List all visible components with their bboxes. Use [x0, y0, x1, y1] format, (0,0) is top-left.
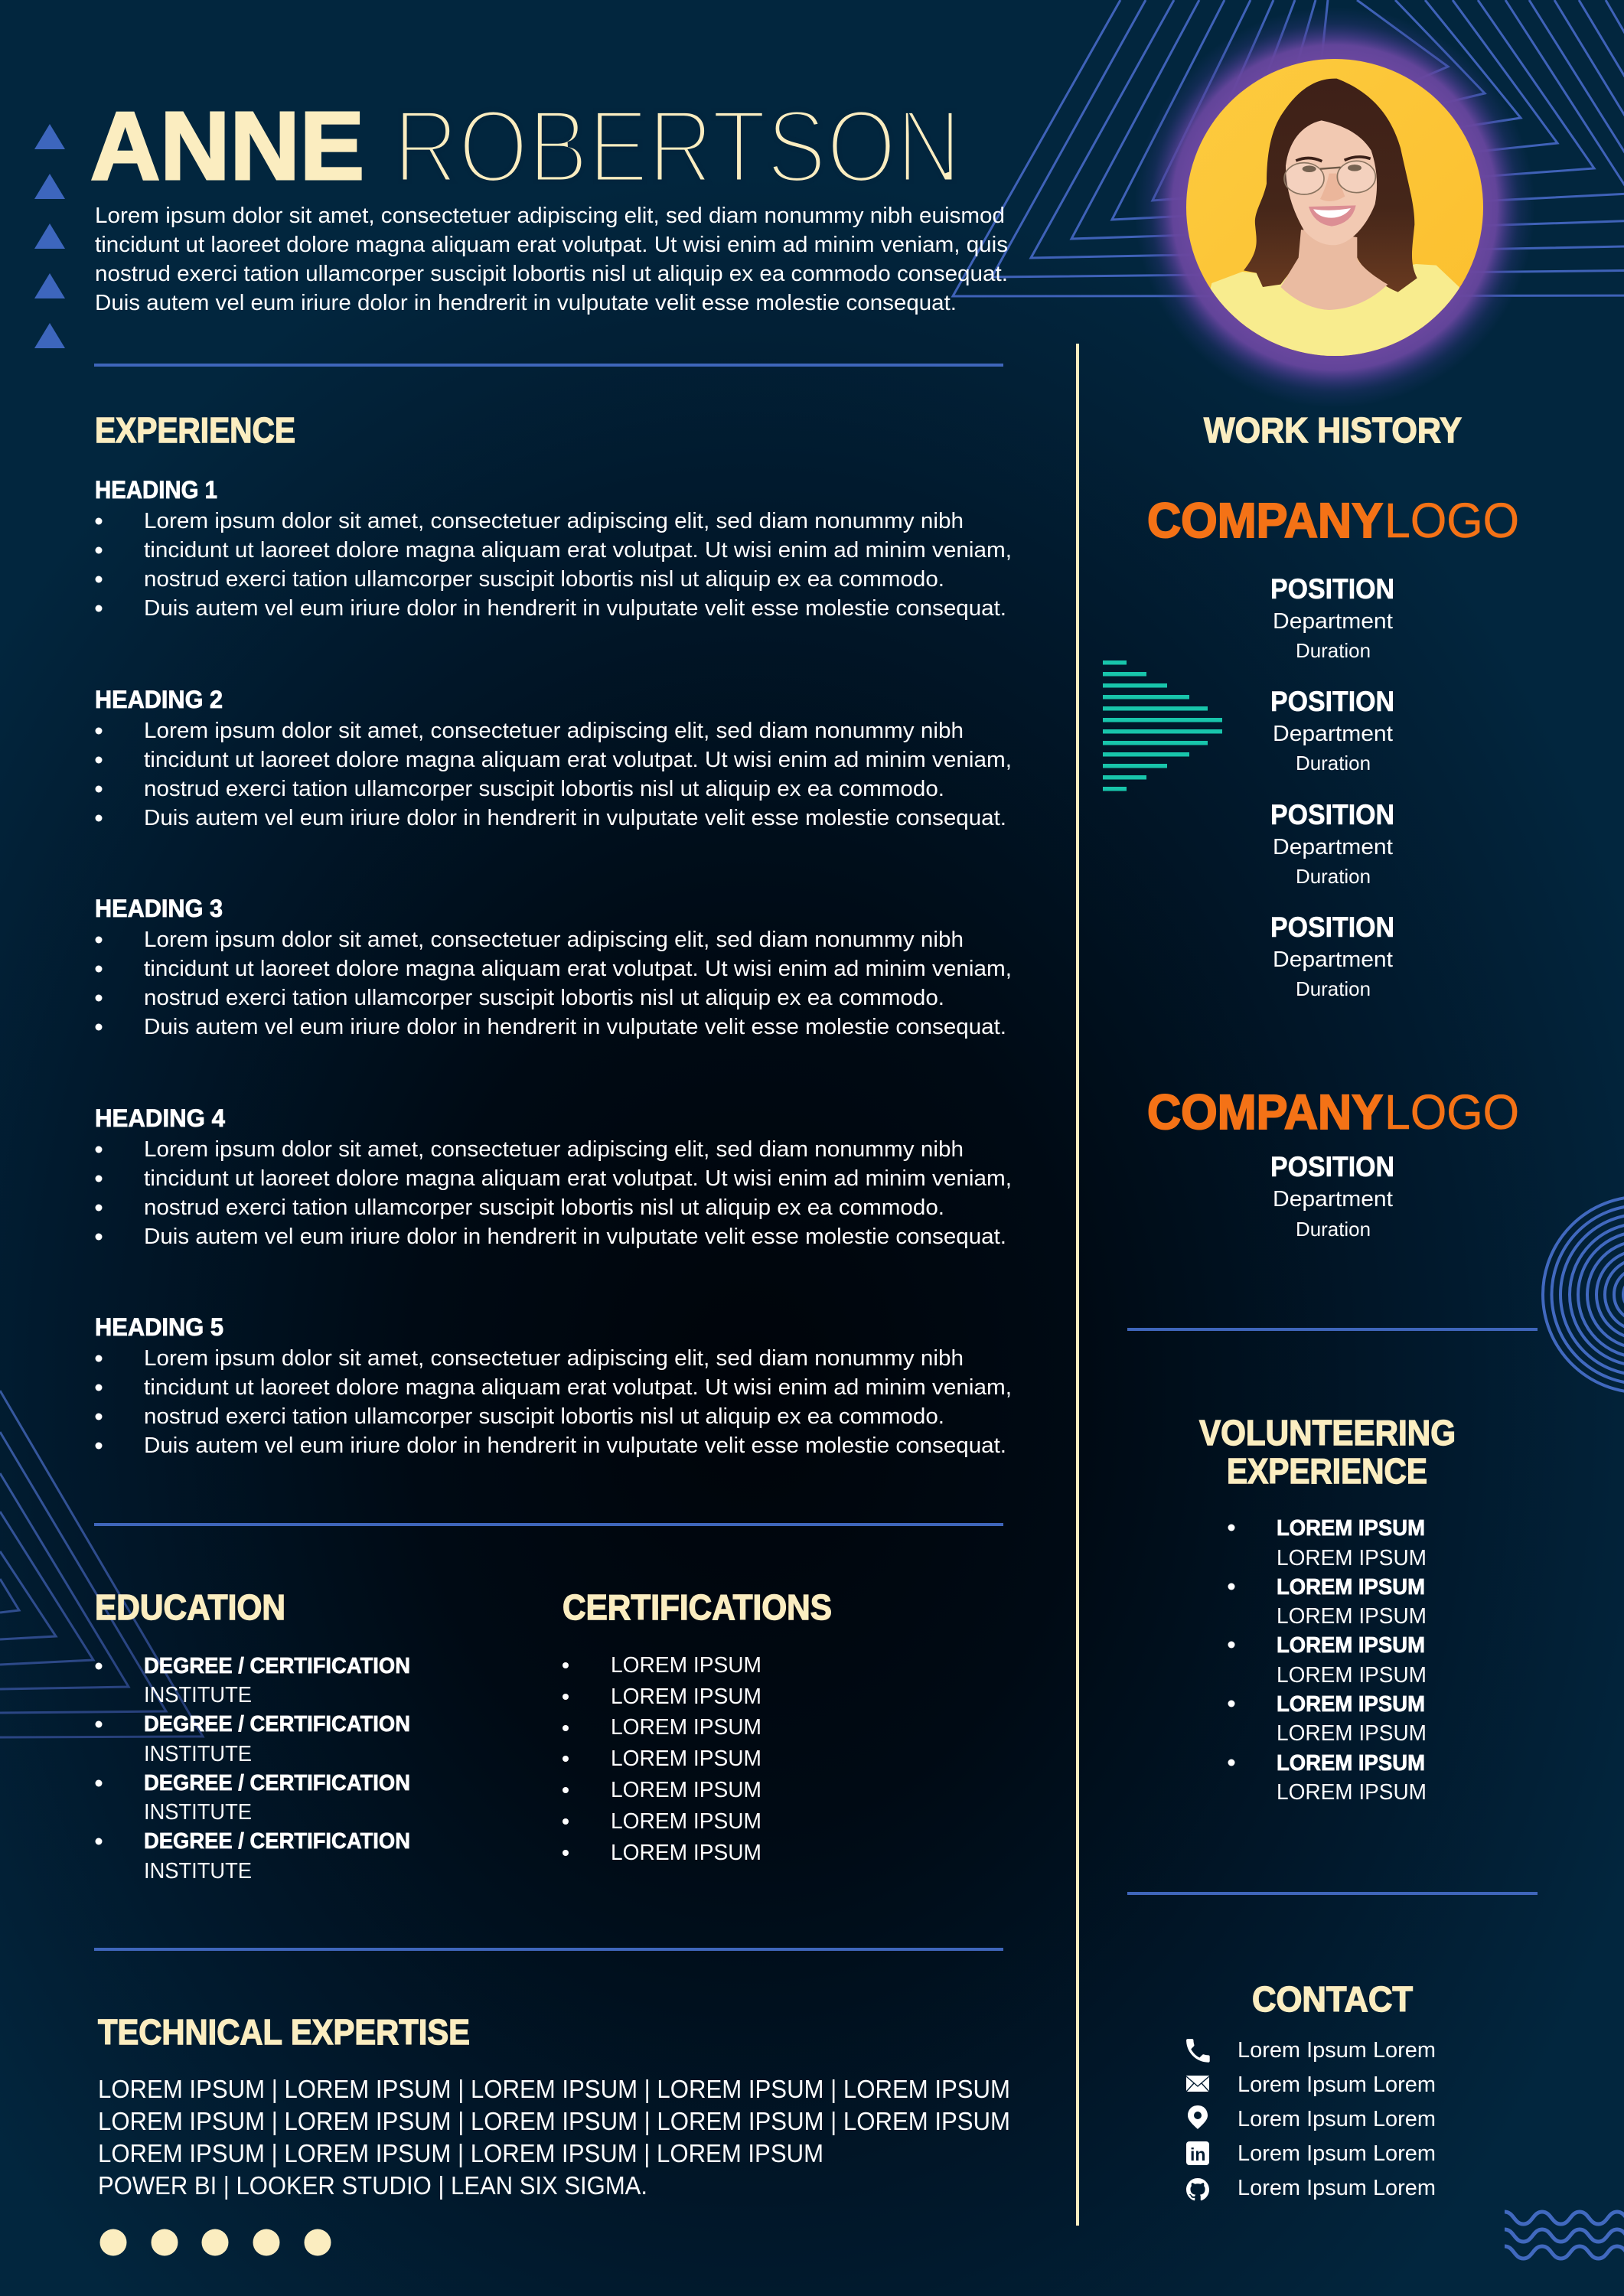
education list	[95, 1654, 410, 1883]
position 3	[1270, 799, 1394, 888]
name title	[90, 88, 961, 204]
experience block 4: tincidunt ut laoreet dolore magna aliquam erat volutpat. Ut wisi enim ad minim veniam,	[144, 1166, 1012, 1191]
experience block 5: Duis autem vel eum iriure dolor in hendrerit in vulputate velit esse molestie consequat.	[144, 1433, 1006, 1458]
experience block 5: nostrud exerci tation ullamcorper suscipit lobortis nisl ut aliquip ex ea commodo.	[144, 1404, 944, 1429]
experience block 1: Lorem ipsum dolor sit amet, consectetuer adipiscing elit, sed diam nonummy nibh	[144, 509, 964, 533]
experience block 1: HEADING 1	[95, 476, 217, 504]
volunteering list: LOREM IPSUM	[1277, 1575, 1425, 1600]
decorative concentric circles	[1543, 1197, 1624, 1393]
position 3: Department	[1273, 835, 1393, 859]
name title: ROBERTSON	[393, 88, 961, 204]
experience block 3: nostrud exerci tation ullamcorper suscipit lobortis nisl ut aliquip ex ea commodo.	[144, 986, 944, 1010]
experience block 3: HEADING 3	[95, 895, 223, 922]
education list: INSTITUTE	[144, 1683, 252, 1707]
experience block 4: nostrud exerci tation ullamcorper suscipit lobortis nisl ut aliquip ex ea commodo.	[144, 1195, 944, 1220]
position 5: Duration	[1296, 1218, 1371, 1241]
experience block 1	[95, 476, 1012, 621]
certifications list: LOREM IPSUM	[611, 1809, 761, 1834]
experience block 2: Lorem ipsum dolor sit amet, consectetuer adipiscing elit, sed diam nonummy nibh	[144, 719, 964, 743]
position 2: Department	[1273, 722, 1393, 746]
position 1: POSITION	[1270, 573, 1394, 605]
education list: DEGREE / CERTIFICATION	[144, 1829, 410, 1854]
experience block 2: HEADING 2	[95, 686, 223, 713]
experience block 5: tincidunt ut laoreet dolore magna aliquam erat volutpat. Ut wisi enim ad minim veniam,	[144, 1375, 1012, 1400]
panel: education	[95, 1587, 410, 1883]
experience block 2: tincidunt ut laoreet dolore magna aliquam erat volutpat. Ut wisi enim ad minim veniam,	[144, 748, 1012, 772]
education list: INSTITUTE	[144, 1742, 252, 1766]
education list: DEGREE / CERTIFICATION	[144, 1654, 410, 1678]
volunteering list: LOREM IPSUM	[1277, 1633, 1425, 1658]
company logo 2	[1147, 1084, 1519, 1140]
volunteering list: LOREM IPSUM	[1277, 1546, 1427, 1570]
company logo 1: COMPANY	[1147, 493, 1383, 548]
position 3: Duration	[1296, 865, 1371, 888]
panel: technical expertise	[98, 2012, 1010, 2256]
volunteering list: LOREM IPSUM	[1277, 1663, 1427, 1688]
intro paragraph	[95, 204, 1008, 315]
experience block 3: tincidunt ut laoreet dolore magna aliquam erat volutpat. Ut wisi enim ad minim veniam,	[144, 957, 1012, 981]
experience block 4: Lorem ipsum dolor sit amet, consectetuer adipiscing elit, sed diam nonummy nibh	[144, 1137, 964, 1162]
position 3: POSITION	[1270, 799, 1394, 830]
decorative waves	[1505, 2212, 1624, 2258]
position 5	[1270, 1151, 1394, 1241]
position 5: POSITION	[1270, 1151, 1394, 1182]
intro paragraph: Duis autem vel eum iriure dolor in hendrerit in vulputate velit esse molestie consequat.	[95, 291, 957, 315]
contact row: github: Lorem Ipsum Lorem	[1238, 2176, 1436, 2200]
heading: experience: EXPERIENCE	[95, 410, 295, 450]
panel: work history	[1147, 410, 1519, 1241]
contact row: location: Lorem Ipsum Lorem	[1238, 2107, 1436, 2131]
experience block 1: tincidunt ut laoreet dolore magna aliquam erat volutpat. Ut wisi enim ad minim veniam,	[144, 538, 1012, 563]
company logo 1: LOGO	[1384, 493, 1519, 548]
decorative concentric triangles top right	[953, 0, 1624, 296]
volunteering list: LOREM IPSUM	[1277, 1721, 1427, 1746]
position 2: POSITION	[1270, 686, 1394, 717]
position 4: Duration	[1296, 977, 1371, 1000]
education list: INSTITUTE	[144, 1800, 252, 1825]
decorative teal bars	[1103, 660, 1222, 791]
volunteering list: LOREM IPSUM	[1277, 1751, 1425, 1776]
expertise text: LOREM IPSUM | LOREM IPSUM | LOREM IPSUM | LOREM IPSUM	[98, 2139, 823, 2167]
experience block 1: Duis autem vel eum iriure dolor in hendrerit in vulputate velit esse molestie consequat.	[144, 596, 1006, 621]
experience block 5: Lorem ipsum dolor sit amet, consectetuer adipiscing elit, sed diam nonummy nibh	[144, 1346, 964, 1371]
volunteering list: LOREM IPSUM	[1277, 1604, 1427, 1629]
panel: experience	[95, 410, 1012, 1458]
position 5: Department	[1273, 1187, 1393, 1212]
experience block 2	[95, 686, 1012, 830]
panel: certifications	[563, 1587, 832, 1865]
expertise text: LOREM IPSUM | LOREM IPSUM | LOREM IPSUM | LOREM IPSUM | LOREM IPSUM	[98, 2107, 1010, 2135]
position 4	[1270, 912, 1394, 1000]
certifications list	[563, 1653, 761, 1865]
contact row: linkedin: in	[1190, 2144, 1205, 2164]
panel: contact	[1186, 1979, 1436, 2200]
volunteering list	[1228, 1516, 1427, 1805]
certifications list: LOREM IPSUM	[611, 1684, 761, 1709]
volunteering list: LOREM IPSUM	[1277, 1516, 1425, 1541]
heading: volunteering experience: EXPERIENCE	[1227, 1451, 1427, 1491]
expertise text: LOREM IPSUM | LOREM IPSUM | LOREM IPSUM | LOREM IPSUM | LOREM IPSUM	[98, 2075, 1010, 2103]
volunteering list: LOREM IPSUM	[1277, 1692, 1425, 1717]
certifications list: LOREM IPSUM	[611, 1841, 761, 1865]
certifications list: LOREM IPSUM	[611, 1778, 761, 1802]
experience block 5	[95, 1313, 1012, 1458]
column divider	[1076, 344, 1079, 2226]
position 4: Department	[1273, 947, 1393, 972]
experience block 3: Lorem ipsum dolor sit amet, consectetuer adipiscing elit, sed diam nonummy nibh	[144, 928, 964, 952]
expertise text: POWER BI | LOOKER STUDIO | LEAN SIX SIGMA.	[98, 2171, 647, 2200]
position 4: POSITION	[1270, 912, 1394, 943]
experience block 3: Duis autem vel eum iriure dolor in hendrerit in vulputate velit esse molestie consequat.	[144, 1015, 1006, 1039]
education list: INSTITUTE	[144, 1859, 252, 1883]
experience block 2: nostrud exerci tation ullamcorper suscipit lobortis nisl ut aliquip ex ea commodo.	[144, 777, 944, 801]
intro paragraph: nostrud exerci tation ullamcorper suscipit lobortis nisl ut aliquip ex ea commodo consequat.	[95, 262, 1008, 286]
contact row: phone: Lorem Ipsum Lorem	[1238, 2038, 1436, 2063]
expertise text	[98, 2075, 1010, 2200]
heading: contact: CONTACT	[1252, 1979, 1413, 2019]
intro paragraph: Lorem ipsum dolor sit amet, consectetuer adipiscing elit, sed diam nonummy nibh euismod	[95, 204, 1005, 228]
rating dots	[99, 2229, 331, 2256]
heading: technical expertise: TECHNICAL EXPERTISE	[98, 2012, 470, 2052]
experience block 2: Duis autem vel eum iriure dolor in hendrerit in vulputate velit esse molestie consequat.	[144, 806, 1006, 830]
portrait photo with purple glow	[1134, 7, 1535, 408]
heading: volunteering experience	[1199, 1413, 1456, 1491]
contact row: linkedin: Lorem Ipsum Lorem	[1238, 2141, 1436, 2166]
experience block 4: HEADING 4	[95, 1104, 225, 1132]
experience block 4: Duis autem vel eum iriure dolor in hendrerit in vulputate velit esse molestie consequat.	[144, 1225, 1006, 1249]
position 1	[1270, 573, 1394, 662]
heading: work history: WORK HISTORY	[1204, 410, 1462, 450]
experience block 1: nostrud exerci tation ullamcorper suscipit lobortis nisl ut aliquip ex ea commodo.	[144, 567, 944, 592]
company logo 2: COMPANY	[1147, 1084, 1383, 1140]
panel: volunteering experience	[1199, 1413, 1456, 1805]
heading: certifications: CERTIFICATIONS	[563, 1587, 832, 1627]
heading: volunteering experience: VOLUNTEERING	[1199, 1413, 1456, 1453]
position 2: Duration	[1296, 752, 1371, 775]
company logo 2: LOGO	[1384, 1084, 1519, 1140]
contact row: email: Lorem Ipsum Lorem	[1238, 2073, 1436, 2097]
volunteering list: LOREM IPSUM	[1277, 1780, 1427, 1805]
triangle column icons	[34, 124, 65, 348]
certifications list: LOREM IPSUM	[611, 1653, 761, 1678]
intro paragraph: tincidunt ut laoreet dolore magna aliquam erat volutpat. Ut wisi enim ad minim veniam, quis	[95, 233, 1008, 257]
education list: DEGREE / CERTIFICATION	[144, 1771, 410, 1795]
position 1: Duration	[1296, 639, 1371, 662]
name title: ANNE	[90, 92, 364, 200]
heading: education: EDUCATION	[95, 1587, 285, 1627]
experience block 3	[95, 895, 1012, 1039]
certifications list: LOREM IPSUM	[611, 1715, 761, 1740]
position 1: Department	[1273, 609, 1393, 634]
company logo 1	[1147, 493, 1519, 548]
education list: DEGREE / CERTIFICATION	[144, 1712, 410, 1737]
experience block 4	[95, 1104, 1012, 1249]
decorative concentric triangles left	[0, 1391, 203, 1737]
certifications list: LOREM IPSUM	[611, 1746, 761, 1771]
experience block 5: HEADING 5	[95, 1313, 223, 1341]
position 2	[1270, 686, 1394, 775]
